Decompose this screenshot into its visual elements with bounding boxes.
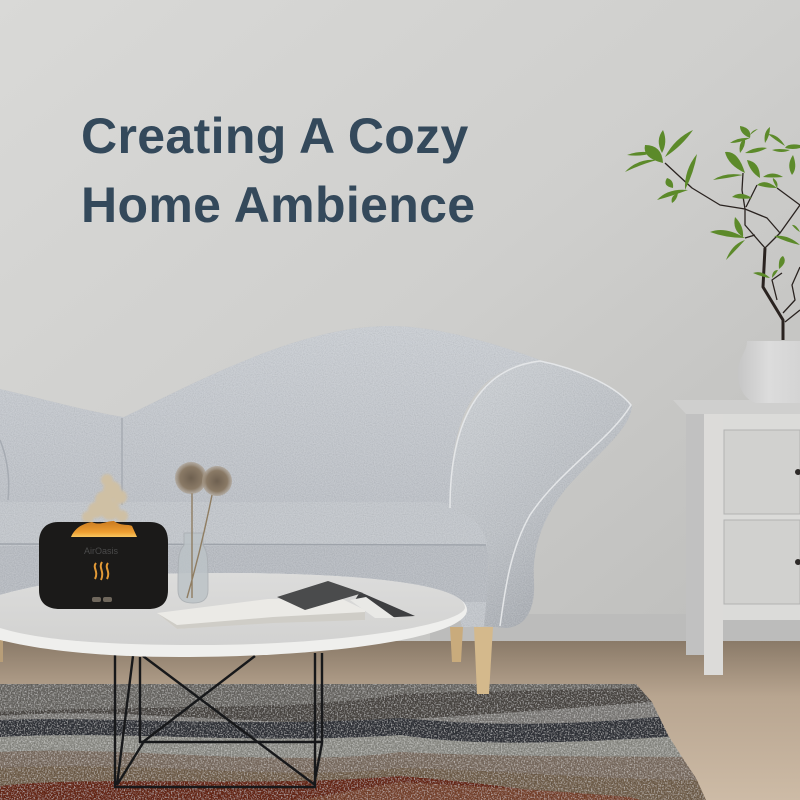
plant pot [738,341,800,403]
diffuser [39,474,168,609]
side cabinet [673,400,800,675]
open book [157,581,415,629]
diffuser body [39,522,168,609]
title: Creating A Cozy [81,108,469,164]
floor [0,641,800,800]
table top [0,573,467,657]
table legs [115,653,322,787]
title: Home Ambience [81,177,475,233]
rug [0,684,706,800]
sofa legs [0,627,493,694]
sofa [0,326,632,694]
logo: AirOasis [84,546,119,556]
flame icon [95,562,108,580]
buttons [92,597,101,602]
vase with dried flowers [175,462,232,603]
plant [625,126,800,340]
steam [82,474,128,523]
baseboard [430,614,800,642]
flame [71,521,137,537]
sofa upholstery [0,326,632,628]
